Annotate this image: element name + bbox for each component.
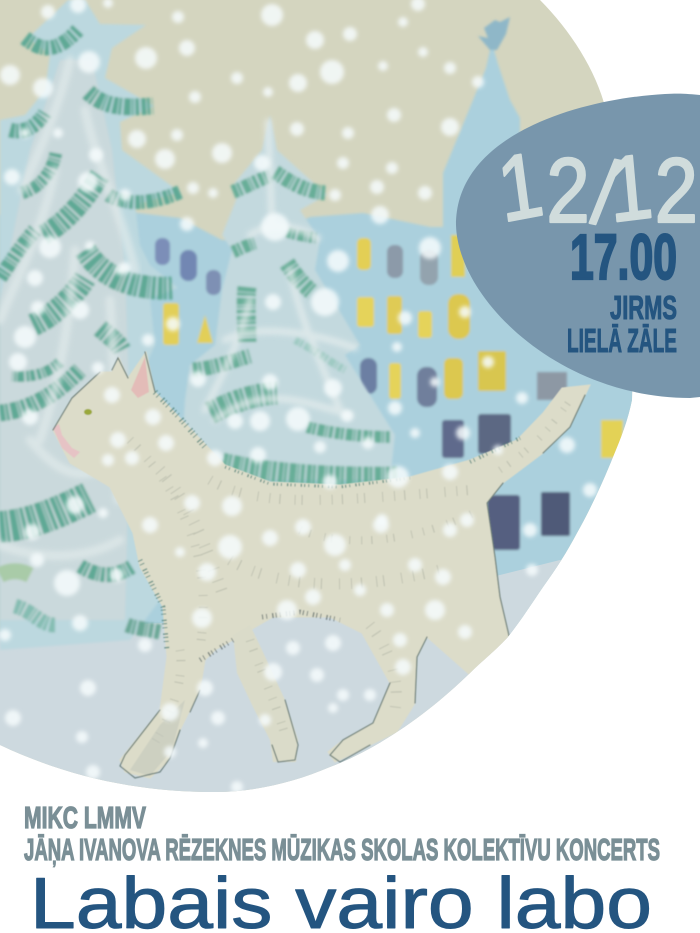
cat far leg — [233, 625, 298, 762]
fir tree left — [0, 0, 180, 650]
tower finial — [478, 17, 510, 50]
building — [0, 17, 640, 640]
ground — [0, 560, 561, 792]
cat feathered edge — [140, 392, 520, 660]
snow — [0, 0, 597, 793]
sky — [0, 0, 640, 800]
cat ear — [131, 357, 149, 398]
date: 12/12 — [490, 134, 698, 246]
illustration: white cat in snowy town — [0, 0, 640, 800]
date blob — [456, 94, 700, 398]
organiser: MIKC LMMV — [24, 800, 146, 835]
middle tree snow load — [205, 122, 355, 420]
cat eye — [84, 409, 92, 415]
fir tree snow load — [0, 60, 135, 556]
venue — [567, 289, 677, 359]
cat body — [53, 352, 590, 778]
fir tree middle — [180, 115, 397, 480]
cat — [53, 352, 590, 778]
cat outline — [53, 352, 585, 778]
windows — [155, 235, 623, 550]
cat muzzle — [53, 424, 80, 458]
cat fur — [130, 400, 570, 750]
cat lower leg shade — [130, 700, 185, 776]
